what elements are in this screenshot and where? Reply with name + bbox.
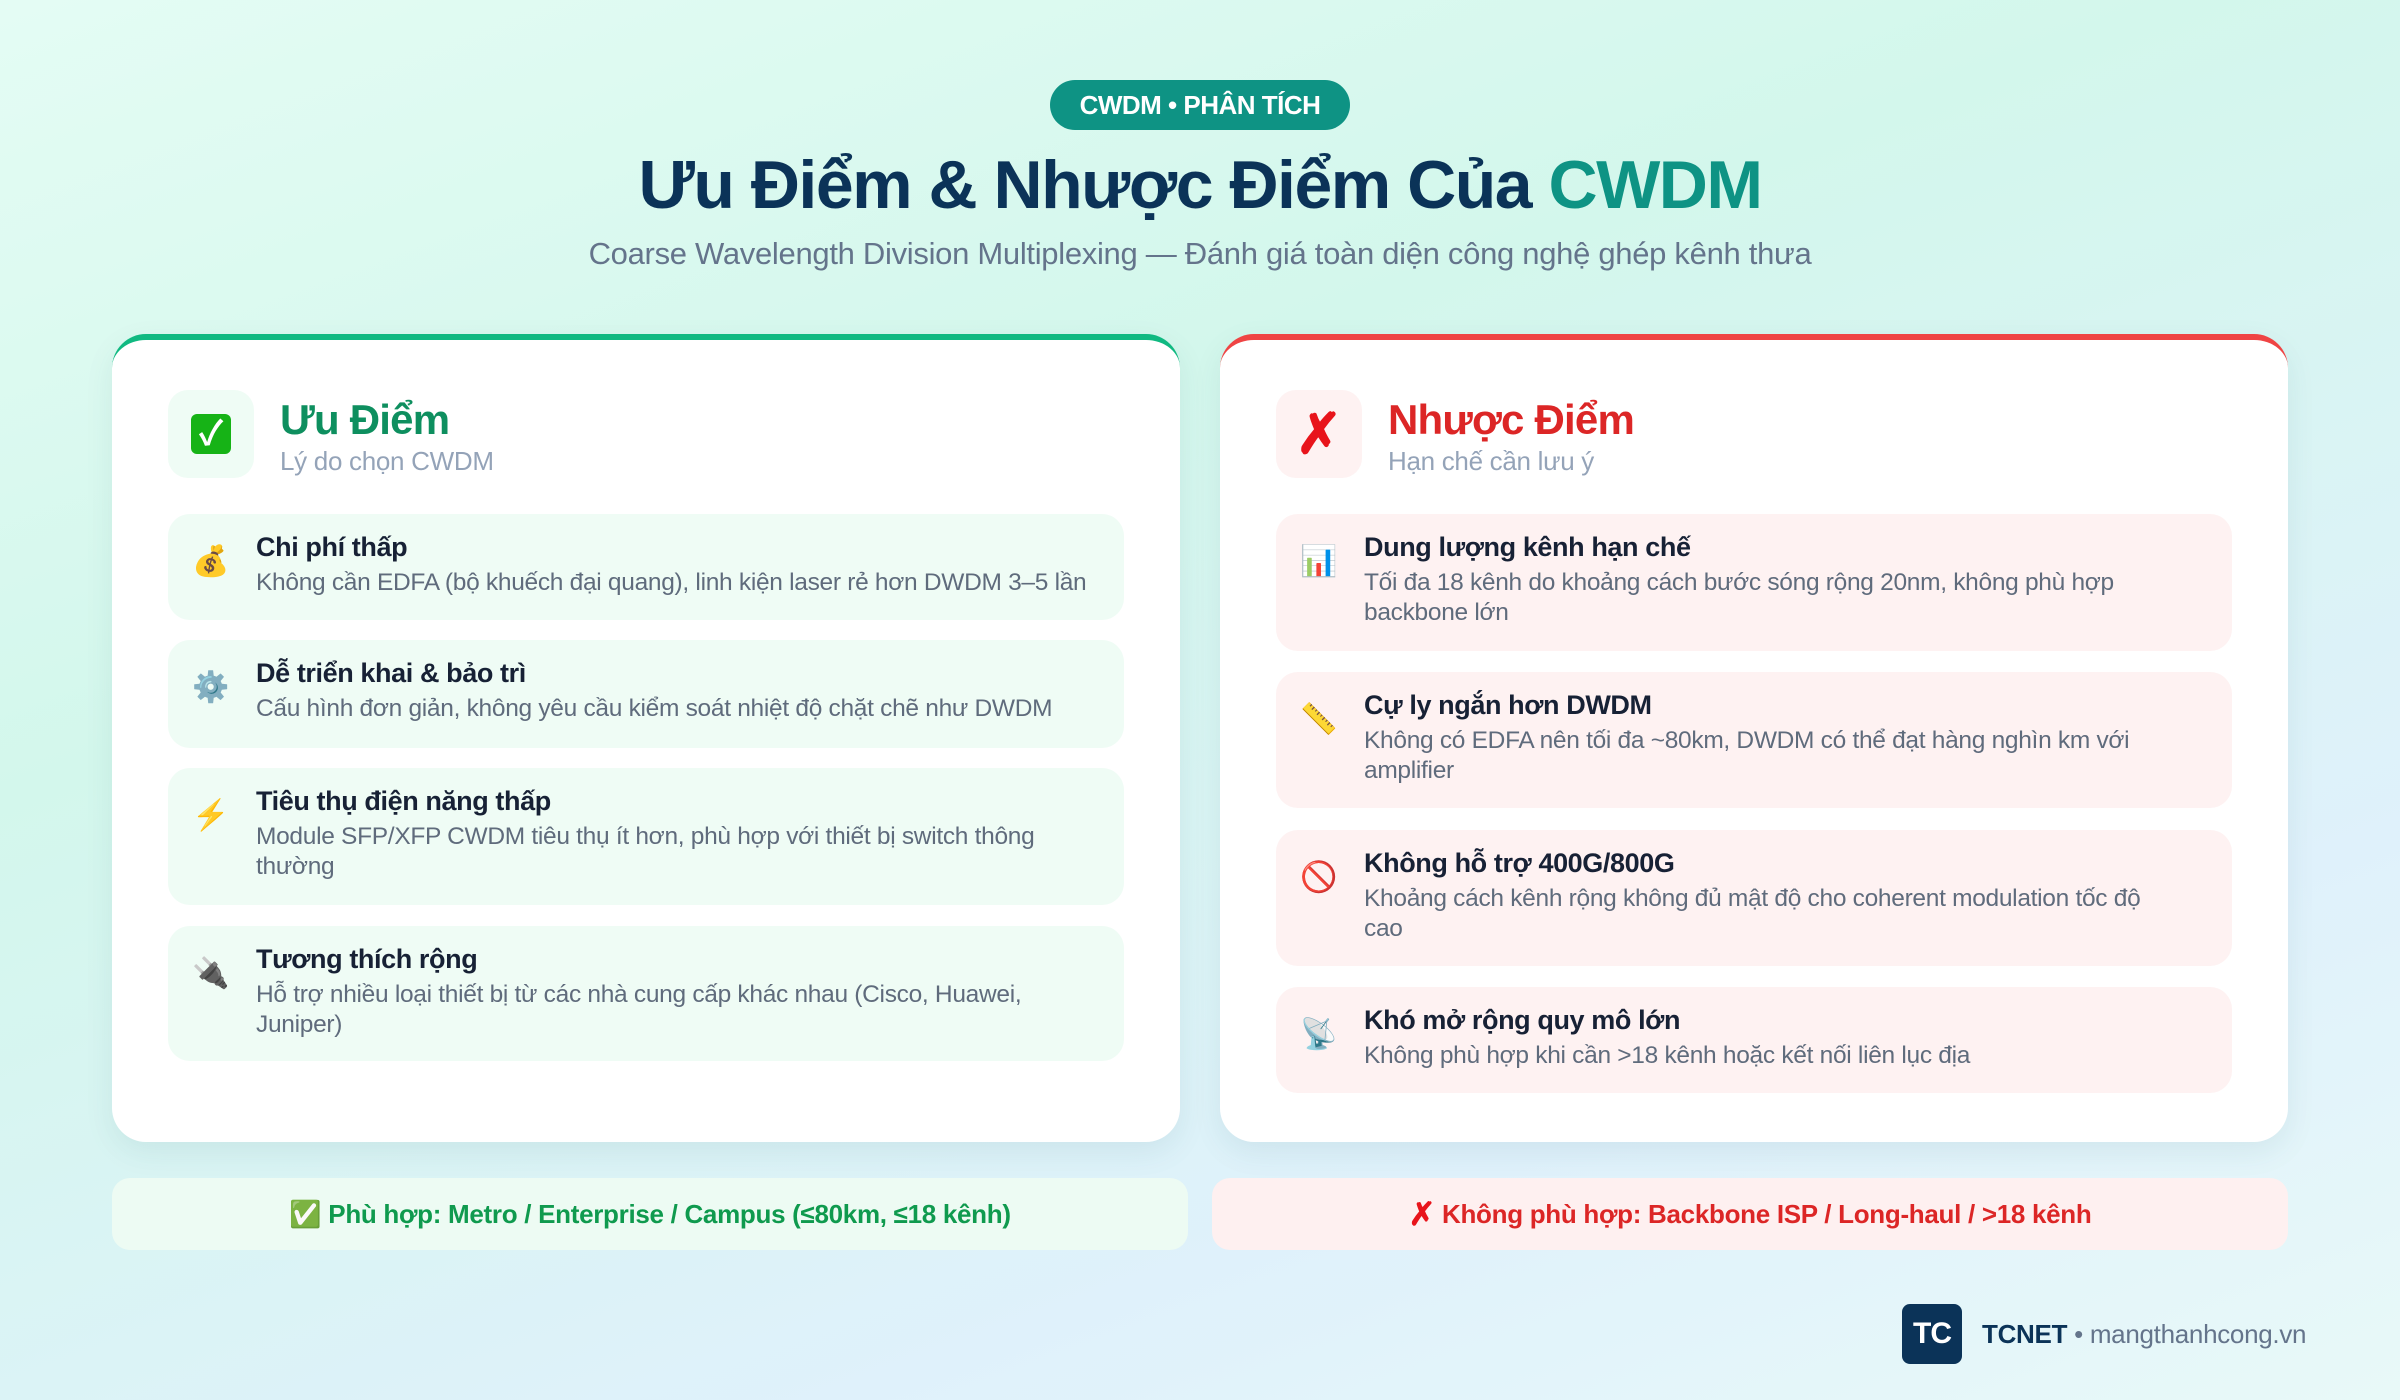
footer: brand (1902, 1304, 2306, 1364)
item: distance: Cự ly ngắn hơn DWDM (1364, 690, 1652, 720)
title: Ưu Điểm & Nhược Điểm Của CWDM (638, 147, 1762, 223)
badge (1050, 80, 1350, 130)
item: distance: Không có EDFA nên tối đa ~80km, DWDM có thể đạt hàng nghìn km với amplifier (1364, 727, 2129, 784)
item: low power (168, 768, 1124, 905)
item: low cost: Không cần EDFA (bộ khuếch đại quang), linh kiện laser rẻ hơn DWDM 3–5 lần (256, 569, 1086, 596)
item: low cost: Chi phí thấp (256, 532, 407, 562)
subtitle: Coarse Wavelength Division Multiplexing — Đánh giá toàn diện công nghệ ghép kênh thưa (589, 236, 1811, 271)
callout: not suitable: ✗ (1409, 1196, 1435, 1232)
item: low power: Module SFP/XFP CWDM tiêu thụ ít hơn, phù hợp với thiết bị switch thông thường (256, 823, 1034, 880)
callout: not suitable (1212, 1178, 2288, 1250)
icon: cross: ✗ (1296, 402, 1342, 465)
item: low power: Tiêu thụ điện năng thấp (256, 786, 551, 816)
item: no 400G: Không hỗ trợ 400G/800G (1364, 848, 1674, 878)
item: channel capacity: Tối đa 18 kênh do khoảng cách bước sóng rộng 20nm, không phù hợp backbone lớn (1364, 569, 2114, 626)
subheading: Hạn chế cần lưu ý (1388, 446, 1594, 476)
subheading: Lý do chọn CWDM (280, 446, 494, 476)
item: low cost: 💰 (192, 545, 230, 578)
item: distance (1276, 672, 2232, 808)
item: easy deploy: Cấu hình đơn giản, không yêu cầu kiểm soát nhiệt độ chặt chẽ như DWDM (256, 695, 1052, 722)
badge: CWDM • PHÂN TÍCH (1080, 90, 1320, 120)
item: channel capacity: Dung lượng kênh hạn chế (1364, 532, 1691, 562)
icon: cross (1276, 390, 1362, 478)
heading: advantages: Ưu Điểm (280, 396, 449, 443)
item: easy deploy (168, 640, 1124, 748)
item: no 400G (1276, 830, 2232, 966)
item: no 400G: cao (1364, 915, 1403, 942)
icon: TC logo (1902, 1304, 1962, 1364)
icon: TC logo: TC (1913, 1317, 1951, 1350)
item: compatibility: Tương thích rộng (256, 944, 477, 974)
item: no 400G: Khoảng cách kênh rộng không đủ mật độ cho coherent modulation tốc độ (1364, 885, 2140, 912)
brand text: TCNET • mangthanhcong.vn (1982, 1318, 2306, 1348)
heading: disadvantages: Nhược Điểm (1388, 396, 1634, 443)
item: low cost (168, 514, 1124, 620)
item: scaling: 📡 (1300, 1018, 1338, 1051)
item: compatibility: 🔌 (192, 957, 230, 990)
item: easy deploy: ⚙️ (192, 671, 230, 704)
callout: suitable (112, 1178, 1188, 1250)
callout: not suitable: Không phù hợp: Backbone ISP / Long-haul / >18 kênh (1442, 1198, 2091, 1228)
item: channel capacity (1276, 514, 2232, 651)
item: scaling: Không phù hợp khi cần >18 kênh hoặc kết nối liên lục địa (1364, 1042, 1970, 1069)
item: easy deploy: Dễ triển khai & bảo trì (256, 658, 526, 688)
panel: advantages (112, 334, 1180, 1142)
item: channel capacity: 📊 (1300, 545, 1338, 578)
item: distance: 📏 (1300, 703, 1338, 736)
callout: suitable: ✅ Phù hợp: Metro / Enterprise / Campus (≤80km, ≤18 kênh) (289, 1198, 1011, 1228)
item: no 400G: 🚫 (1300, 861, 1338, 894)
panel: disadvantages (1220, 334, 2288, 1142)
icon: check (168, 390, 254, 478)
item: scaling: Khó mở rộng quy mô lớn (1364, 1005, 1680, 1035)
item: compatibility: Hỗ trợ nhiều loại thiết bị từ các nhà cung cấp khác nhau (Cisco, Huawei, Juniper) (256, 981, 1021, 1038)
item: compatibility (168, 926, 1124, 1061)
item: low power: ⚡ (192, 799, 230, 832)
item: scaling (1276, 987, 2232, 1093)
icon: check: ✓ (199, 415, 223, 453)
